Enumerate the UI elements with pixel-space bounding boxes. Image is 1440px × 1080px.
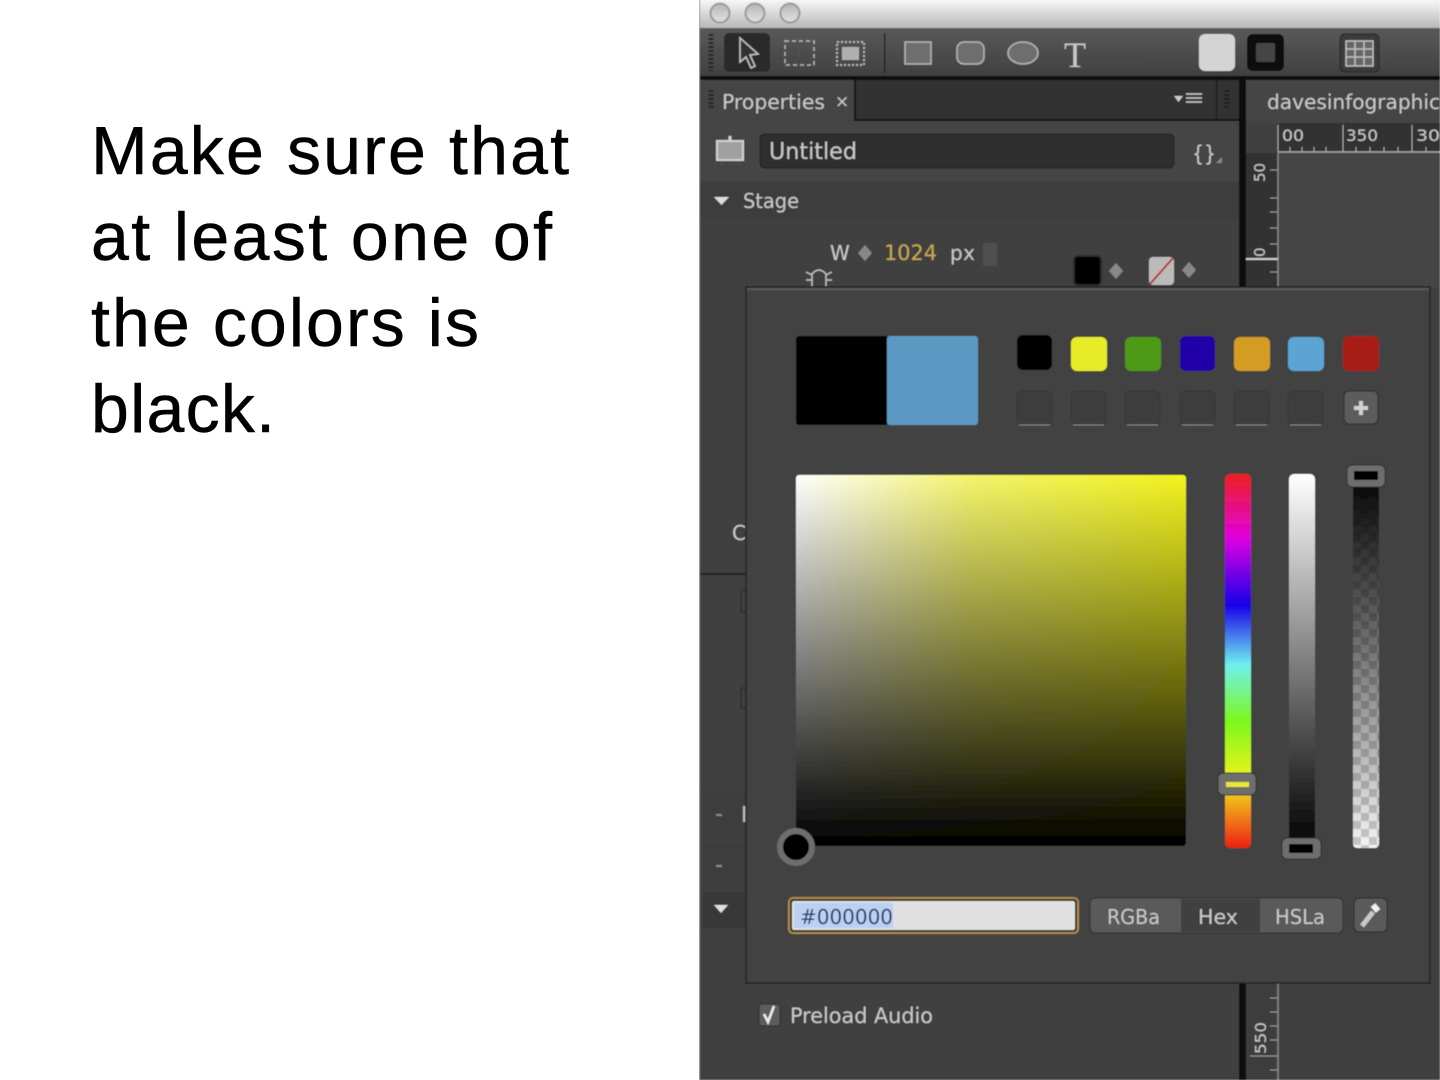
toolbar bbox=[700, 28, 1440, 80]
stage properties bbox=[806, 241, 1196, 286]
colour format buttons: RGBa bbox=[1107, 905, 1160, 929]
vertical ruler: 0 bbox=[1251, 247, 1269, 257]
application window bbox=[699, 0, 1440, 1080]
toolbar: T bbox=[1064, 35, 1086, 75]
vertical ruler bbox=[1246, 153, 1440, 288]
panel background and preload audio checkbox: Preload Audio bbox=[790, 1004, 933, 1028]
colour format buttons bbox=[1090, 898, 1343, 933]
composition name row bbox=[700, 121, 1240, 181]
heading text: black. bbox=[91, 371, 275, 447]
properties panel tab bar: Properties bbox=[722, 90, 825, 114]
stage properties: 1024 bbox=[884, 241, 937, 265]
stage section header bbox=[700, 182, 1240, 219]
horizontal ruler: 30 bbox=[1416, 126, 1440, 145]
heading text: the colors is bbox=[91, 285, 479, 361]
colour format buttons: HSLa bbox=[1275, 905, 1325, 929]
horizontal ruler: 00 bbox=[1282, 126, 1304, 145]
properties panel tab bar bbox=[700, 80, 1240, 121]
vertical ruler: 50 bbox=[1251, 163, 1269, 182]
stage section header: Stage bbox=[743, 189, 799, 213]
colour picker dialog bbox=[746, 287, 1430, 983]
horizontal ruler: 350 bbox=[1346, 126, 1378, 145]
left panel rows behind the dialog: C bbox=[732, 521, 746, 545]
composition name row: Untitled bbox=[769, 139, 857, 165]
document tab: davesinfographic bbox=[1267, 90, 1440, 114]
title bar with window buttons bbox=[700, 0, 1440, 28]
alpha slider bbox=[1347, 465, 1385, 848]
composition name row: {} bbox=[1192, 142, 1216, 166]
preset colour swatches bbox=[1017, 335, 1379, 371]
left panel rows behind the dialog bbox=[700, 521, 746, 928]
stage properties: W bbox=[830, 241, 850, 265]
hex colour input: #000000 bbox=[800, 905, 893, 929]
lower vertical ruler: 550 bbox=[1252, 1022, 1270, 1054]
properties panel tab bar: × bbox=[835, 92, 849, 112]
lower vertical ruler bbox=[1246, 983, 1278, 1080]
empty swatch slots and add button bbox=[1017, 391, 1378, 425]
current and previous colour swatch bbox=[796, 336, 978, 425]
heading text bbox=[91, 113, 569, 447]
hex colour input bbox=[789, 898, 1078, 933]
lightness slider bbox=[1282, 474, 1321, 859]
heading text: at least one of bbox=[91, 199, 552, 275]
stage properties: px bbox=[950, 241, 975, 265]
eyedropper button bbox=[1354, 898, 1387, 932]
document tab bbox=[1239, 80, 1440, 1080]
colour format buttons: Hex bbox=[1198, 905, 1238, 929]
horizontal ruler bbox=[1246, 123, 1440, 153]
hue slider bbox=[1218, 474, 1256, 848]
saturation and brightness square bbox=[780, 475, 1186, 863]
heading text: Make sure that bbox=[91, 113, 569, 189]
